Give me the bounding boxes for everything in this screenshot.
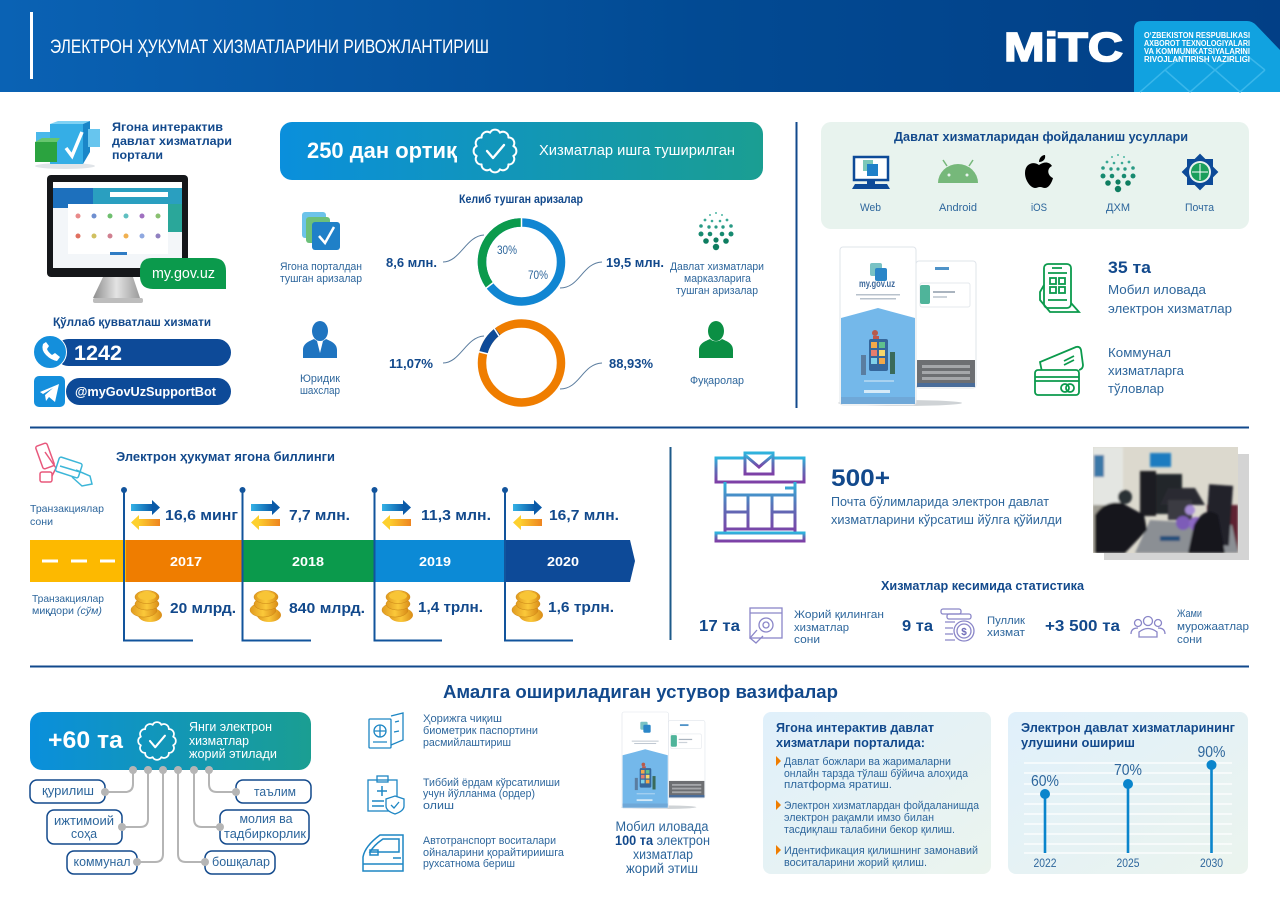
icon: monitor with site	[47, 175, 188, 303]
donut values: 19,5 млн.	[606, 255, 664, 270]
photo: post office visitors	[1093, 447, 1249, 560]
label: transaction amount	[32, 593, 104, 617]
telegram pill	[34, 376, 231, 407]
panel: share chart: 2022	[1034, 858, 1056, 870]
stat: mobile services: Мобил иловада	[1108, 282, 1207, 297]
icon: passport	[369, 713, 403, 748]
label: post: Почта	[1185, 202, 1215, 214]
section heading: priorities: Амалга ошириладиган устувор вазифалар	[443, 681, 838, 702]
sector labels: ижтимоий	[54, 814, 114, 828]
panel: share chart: 90%	[1198, 744, 1226, 761]
statistics heading: Хизматлар кесимида статистика	[881, 579, 1085, 593]
telegram pill: @myGovUzSupportBot	[75, 384, 217, 399]
transaction amounts	[170, 600, 614, 617]
stat: paid services: 9 та	[902, 618, 933, 635]
panel: access methods	[821, 122, 1249, 229]
ministry panel: RIVOJLANTIRISH VAZIRLIGI	[1144, 55, 1250, 64]
portal heading: Ягона интерактив	[112, 120, 223, 134]
ministry panel	[1134, 21, 1280, 92]
logo: MITC: MiTC	[1004, 24, 1123, 70]
sector labels: коммунал	[74, 855, 130, 869]
applications heading: Келиб тушган аризалар	[459, 194, 583, 206]
panel: portal tasks: Идентификация қилишнинг замонавий	[784, 845, 978, 857]
label: legal entities: шахслар	[300, 385, 340, 397]
mobile app target: 100 та электрон	[615, 833, 710, 848]
donut values: 88,93%	[609, 356, 653, 371]
panel: share chart: 60%	[1031, 773, 1059, 790]
transaction counts	[165, 508, 619, 524]
sector labels: қурилиш	[42, 784, 94, 798]
stat: total appeals: +3 500 та	[1045, 618, 1120, 635]
panel: portal tasks: тасдиқлаш талабини бекор қилиш.	[784, 824, 955, 836]
panel: share chart: улушини ошириш	[1021, 736, 1135, 750]
panel: share chart: Электрон давлат хизматларининг	[1021, 721, 1235, 735]
label: transaction amount: Транзакциялар	[32, 593, 104, 605]
donut chart: sources	[443, 217, 602, 302]
icon: legal person	[303, 321, 337, 358]
stat: utility payments: Коммунал	[1108, 345, 1171, 360]
stat: utility payments: хизматларга	[1108, 363, 1185, 378]
phone pill	[34, 336, 231, 368]
donut values: 11,07%	[389, 356, 433, 371]
panel: 60 new services: +60 та	[48, 727, 124, 754]
stat: total appeals: сони	[1177, 634, 1202, 646]
icon: medical order	[368, 776, 404, 814]
icon: car door	[363, 835, 403, 871]
stat: mobile services: электрон хизматлар	[1108, 301, 1232, 316]
stat: mobile services: 35 та	[1108, 258, 1152, 277]
stat: implemented services: Жорий қилинган	[794, 609, 884, 621]
connector lines	[105, 770, 236, 862]
timeline markers	[121, 487, 573, 640]
timeline bar	[30, 540, 635, 582]
access heading: Давлат хизматларидан фойдаланиш усуллари	[894, 130, 1188, 144]
label: centre applications: Давлат хизматлари	[670, 261, 764, 273]
icon: cubes	[35, 121, 100, 169]
transaction counts: 16,6 минг	[165, 508, 238, 524]
transaction counts: 7,7 млн.	[289, 508, 350, 524]
panel: billing	[30, 443, 635, 640]
panel: support	[34, 315, 231, 407]
label: portal applications	[280, 261, 362, 285]
icon: billing	[35, 443, 92, 486]
sector labels: соҳа	[71, 827, 97, 841]
portal heading: портали	[112, 148, 163, 162]
panel: portal	[35, 120, 232, 303]
banner: 250 services	[280, 122, 763, 180]
panel: share chart: 70%	[1114, 762, 1142, 779]
transaction amounts: 20 млрд.	[170, 601, 236, 617]
task: tinted windows: ойналарини қорайтириишга	[423, 847, 565, 859]
icon: post emblem	[1182, 154, 1218, 190]
task: medical order	[423, 777, 560, 812]
icon: citizen	[699, 321, 733, 358]
mobile app target: Мобил иловада	[616, 819, 709, 834]
donut values	[386, 255, 664, 371]
mobile app target: жорий этиш	[626, 861, 698, 876]
transaction amounts: 1,6 трлн.	[548, 600, 614, 616]
panel: portal tasks: Ягона интерактив давлат	[776, 721, 934, 735]
label: transaction count	[30, 503, 104, 528]
post office description	[831, 495, 1062, 527]
panel: portal tasks	[763, 712, 991, 874]
label: legal entities	[300, 373, 340, 397]
label: portal applications: тушган аризалар	[280, 273, 362, 285]
ministry panel: O‘ZBEKISTON RESPUBLIKASI	[1144, 31, 1250, 40]
stat: paid services	[902, 609, 1025, 641]
banner: 250 services: 250 дан ортиқ	[307, 138, 458, 163]
stat: implemented services: сони	[794, 634, 820, 646]
header band	[0, 0, 1280, 92]
task: medical order: Тиббий ёрдам кўрсатилиши	[423, 777, 560, 789]
icon: DXM dots	[1100, 154, 1136, 192]
transaction counts: 11,3 млн.	[421, 508, 491, 524]
phone pill: 1242	[74, 342, 122, 365]
sector labels: таълим	[254, 785, 296, 799]
portal heading	[112, 120, 232, 162]
mobile app target: хизматлар	[633, 847, 693, 862]
label: centre applications: марказларига	[684, 273, 752, 285]
stat: total appeals: Жами	[1177, 608, 1202, 620]
stat: paid services: $	[961, 627, 967, 638]
timeline bar: 2019	[419, 554, 451, 569]
panel: applications	[280, 194, 764, 402]
icons: transaction arrows	[131, 500, 542, 530]
icon: post office	[716, 453, 804, 541]
label: my.gov.uz	[140, 258, 226, 289]
sector labels: тадбиркорлик	[224, 827, 307, 841]
panel: portal tasks: хизматлари порталида:	[776, 736, 925, 750]
stat: implemented services	[699, 608, 884, 646]
stat: 500+: 500+	[831, 465, 890, 492]
sector boxes	[30, 780, 311, 874]
panel: 60 new services: хизматлар	[189, 734, 249, 748]
task: tinted windows	[423, 835, 565, 870]
panel: 60 new services	[30, 712, 311, 874]
transaction amounts: 840 млрд.	[289, 601, 365, 617]
panel: portal tasks: Давлат божлари ва жарималарни	[784, 756, 951, 768]
donut chart: sources: 30%	[497, 243, 517, 257]
label: DXM: ДХМ	[1106, 202, 1130, 214]
label: centre applications	[670, 261, 764, 297]
donut chart: applicants	[443, 324, 602, 402]
task: medical order: олиш	[423, 800, 454, 812]
stat: utility payments	[1108, 345, 1185, 396]
task: passport: Ҳорижга чиқиш	[423, 713, 502, 725]
timeline bar: 2018	[292, 554, 324, 569]
ministry panel: VA KOMMUNIKATSIYALARINI	[1144, 47, 1250, 56]
label: web: Web	[860, 202, 881, 214]
mobile app target	[615, 712, 710, 876]
task: passport: расмийлаштириш	[423, 737, 511, 749]
icon: apple	[1025, 155, 1053, 188]
support heading: Қўллаб қувватлаш хизмати	[53, 315, 211, 329]
stat: mobile services	[1108, 258, 1232, 316]
donut chart: sources: 70%	[528, 268, 548, 282]
label: citizens: Фуқаролар	[690, 375, 744, 387]
timeline bar: 2017	[170, 554, 202, 569]
sector labels: бошқалар	[212, 855, 270, 869]
icon: phone in hand	[1040, 264, 1079, 312]
transaction amounts: 1,4 трлн.	[418, 600, 483, 616]
panel: portal tasks: Электрон хизматлардан фойдаланишда	[784, 800, 979, 812]
label: my.gov.uz: my.gov.uz	[152, 265, 215, 282]
icon: service centres dots	[698, 212, 734, 250]
icon: web	[852, 157, 890, 189]
label: android: Android	[939, 202, 977, 214]
stat: implemented services: 17 та	[699, 618, 740, 635]
post office description: Почта бўлимларида электрон давлат	[831, 495, 1049, 509]
panel: portal tasks: воситаларини жорий қилиш.	[784, 857, 927, 869]
label: portal applications: Ягона порталдан	[280, 261, 362, 273]
mobile app phones: my.gov.uz	[859, 279, 895, 290]
label: transaction amount: миқдори (сўм)	[32, 605, 102, 617]
title: ЭЛЕКТРОН ҲУКУМАТ ХИЗМАТЛАРИНИ РИВОЖЛАНТИРИШ	[50, 37, 489, 58]
lollipop bars	[1040, 760, 1216, 853]
task: passport: биометрик паспортини	[423, 725, 538, 737]
label: legal entities: Юридик	[300, 373, 340, 385]
panel: post offices	[699, 447, 1249, 646]
mobile app phones	[838, 247, 976, 406]
task: medical order: учун йўлланма (ордер)	[423, 788, 535, 800]
donut values: 8,6 млн.	[386, 255, 437, 270]
label: transaction count: Транзакциялар	[30, 503, 104, 515]
label: iOS: iOS	[1031, 202, 1047, 214]
panel: portal tasks: электрон рақамли имзо билан	[784, 812, 934, 824]
task: passport	[423, 713, 538, 749]
panel: share chart	[1008, 712, 1248, 874]
stat: total appeals	[1045, 608, 1249, 646]
panel: share chart: 2025	[1116, 858, 1140, 870]
icon: bank cards	[1035, 347, 1083, 395]
sector labels	[42, 784, 307, 869]
task: tinted windows: рухсатнома бериш	[423, 858, 515, 870]
panel: portal tasks: платформа яратиш.	[784, 779, 892, 791]
stat: paid services: Пуллик	[987, 615, 1025, 627]
task: tinted windows: Автотранспорт воситалари	[423, 835, 556, 847]
label: centre applications: тушган аризалар	[676, 285, 758, 297]
banner: 250 services: Хизматлар ишга туширилган	[539, 142, 735, 159]
stat: total appeals: мурожаатлар	[1177, 621, 1249, 633]
label: transaction count: сони	[30, 516, 53, 528]
panel: 60 new services: Янги электрон	[189, 720, 272, 734]
panel: 60 new services: жорий этилади	[189, 747, 277, 761]
timeline bar: 2020	[547, 554, 579, 569]
stat: implemented services: хизматлар	[794, 622, 849, 634]
ministry panel: AXBOROT TEXNOLOGIYALARI	[1144, 39, 1250, 48]
sector labels: молия ва	[240, 812, 293, 826]
icon: stacked cards	[302, 212, 340, 250]
stat: utility payments: тўловлар	[1108, 381, 1164, 396]
billing heading: Электрон ҳукумат ягона биллинги	[116, 450, 335, 464]
transaction counts: 16,7 млн.	[549, 508, 619, 524]
post office description: хизматларини кўрсатиш йўлга қўйилди	[831, 513, 1062, 527]
panel: share chart: 2030	[1200, 858, 1223, 870]
stat: paid services: хизмат	[987, 627, 1025, 639]
panel: portal tasks: онлайн тарзда тўлаш бўйича алоҳида	[784, 768, 968, 780]
icon: android	[938, 160, 978, 183]
icons: coins	[131, 590, 543, 622]
portal heading: давлат хизматлари	[112, 134, 232, 148]
